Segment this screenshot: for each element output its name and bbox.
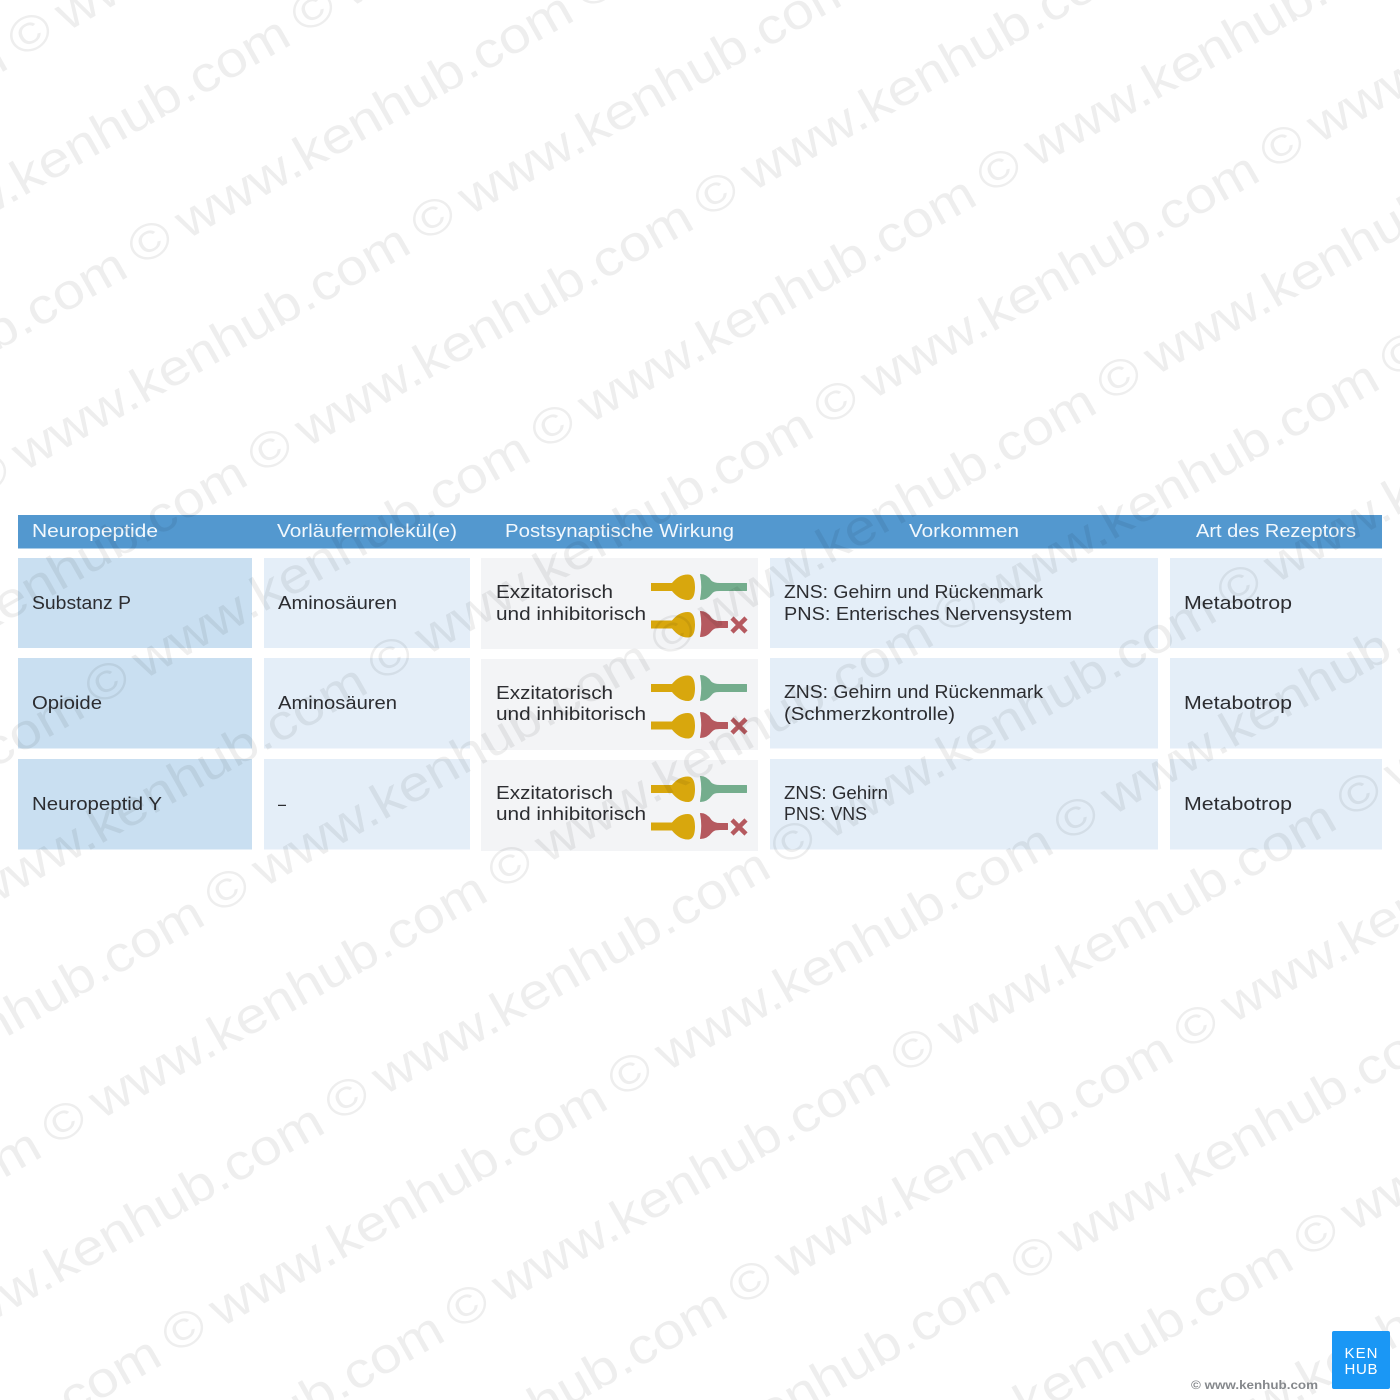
watermark pattern: © www.kenhub.com [521,164,985,460]
row: Substanz P: PNS: Enterisches Nervensystem [784,603,1072,624]
watermark pattern: © www.kenhub.com [435,1044,899,1340]
row: Opioide: Metabotrop [1184,692,1292,713]
watermark pattern: © www.kenhub.com [118,0,582,276]
row: Opioide [18,658,1382,750]
row: Substanz P: Aminosäuren [278,592,397,613]
logo: Kenhub: HUB [1344,1361,1378,1378]
row: Substanz P: und inhibitorisch [496,603,646,624]
row: Neuropeptid Y: – [278,793,287,814]
row: Substanz P [18,558,1382,649]
watermark pattern: © www.kenhub.com [315,836,779,1132]
watermark pattern: © www.kenhub.com [75,420,539,716]
row: Substanz P: Substanz P [32,592,131,613]
row: Neuropeptid Y: Metabotrop [1184,793,1292,814]
watermark pattern: © www.kenhub.com [804,140,1268,436]
row: Substanz P: Exzitatorisch [496,581,613,602]
watermark pattern: © www.kenhub.com [195,628,659,924]
row: Substanz P: Metabotrop [1184,592,1292,613]
watermark pattern: © www.kenhub.com [881,788,1345,1084]
watermark pattern: © www.kenhub.com [32,860,496,1156]
watermark pattern: © www.kenhub.com [1001,996,1400,1292]
watermark pattern: © www.kenhub.com [641,372,1105,668]
watermark pattern: © www.kenhub.com [238,188,702,484]
row: Neuropeptid Y: ZNS: Gehirn [784,782,888,803]
row: Opioide: und inhibitorisch [496,703,646,724]
watermark pattern: © www.kenhub.com [761,580,1225,876]
watermark pattern: © www.kenhub.com [924,348,1388,644]
watermark pattern: © www.kenhub.com [358,396,822,692]
copyright line: © www.kenhub.com [1191,1380,1318,1392]
row: Opioide: Aminosäuren [278,692,397,713]
header bar: Postsynaptische Wirkung [505,520,734,541]
header bar: Art des Rezeptors [1196,520,1356,541]
row: Neuropeptid Y: und inhibitorisch [496,803,646,824]
logo: Kenhub [1332,1331,1390,1389]
row: Opioide: Exzitatorisch [496,682,613,703]
watermark pattern: © www.kenhub.com [152,1068,616,1364]
watermark pattern: © www.kenhub.com [478,604,942,900]
row: Opioide: ZNS: Gehirn und Rückenmark [784,681,1044,702]
row: Neuropeptid Y [18,759,1382,851]
row: Neuropeptid Y: PNS: VNS [784,803,867,824]
table [18,515,1382,851]
header bar: Neuropeptide [32,520,158,541]
row: Opioide: Opioide [32,692,102,713]
watermark pattern: © www.kenhub.com [598,812,1062,1108]
header bar: Vorkommen [909,520,1019,541]
row: Neuropeptid Y: Neuropeptid Y [32,793,162,814]
row: Substanz P: ZNS: Gehirn und Rückenmark [784,581,1044,602]
header bar: Vorläufermolekül(e) [277,520,457,541]
row: Opioide: (Schmerzkontrolle) [784,703,955,724]
row: Neuropeptid Y: Exzitatorisch [496,782,613,803]
logo: Kenhub: KEN [1344,1345,1378,1362]
watermark pattern: © www.kenhub.com [718,1020,1182,1316]
header bar [18,515,1382,548]
